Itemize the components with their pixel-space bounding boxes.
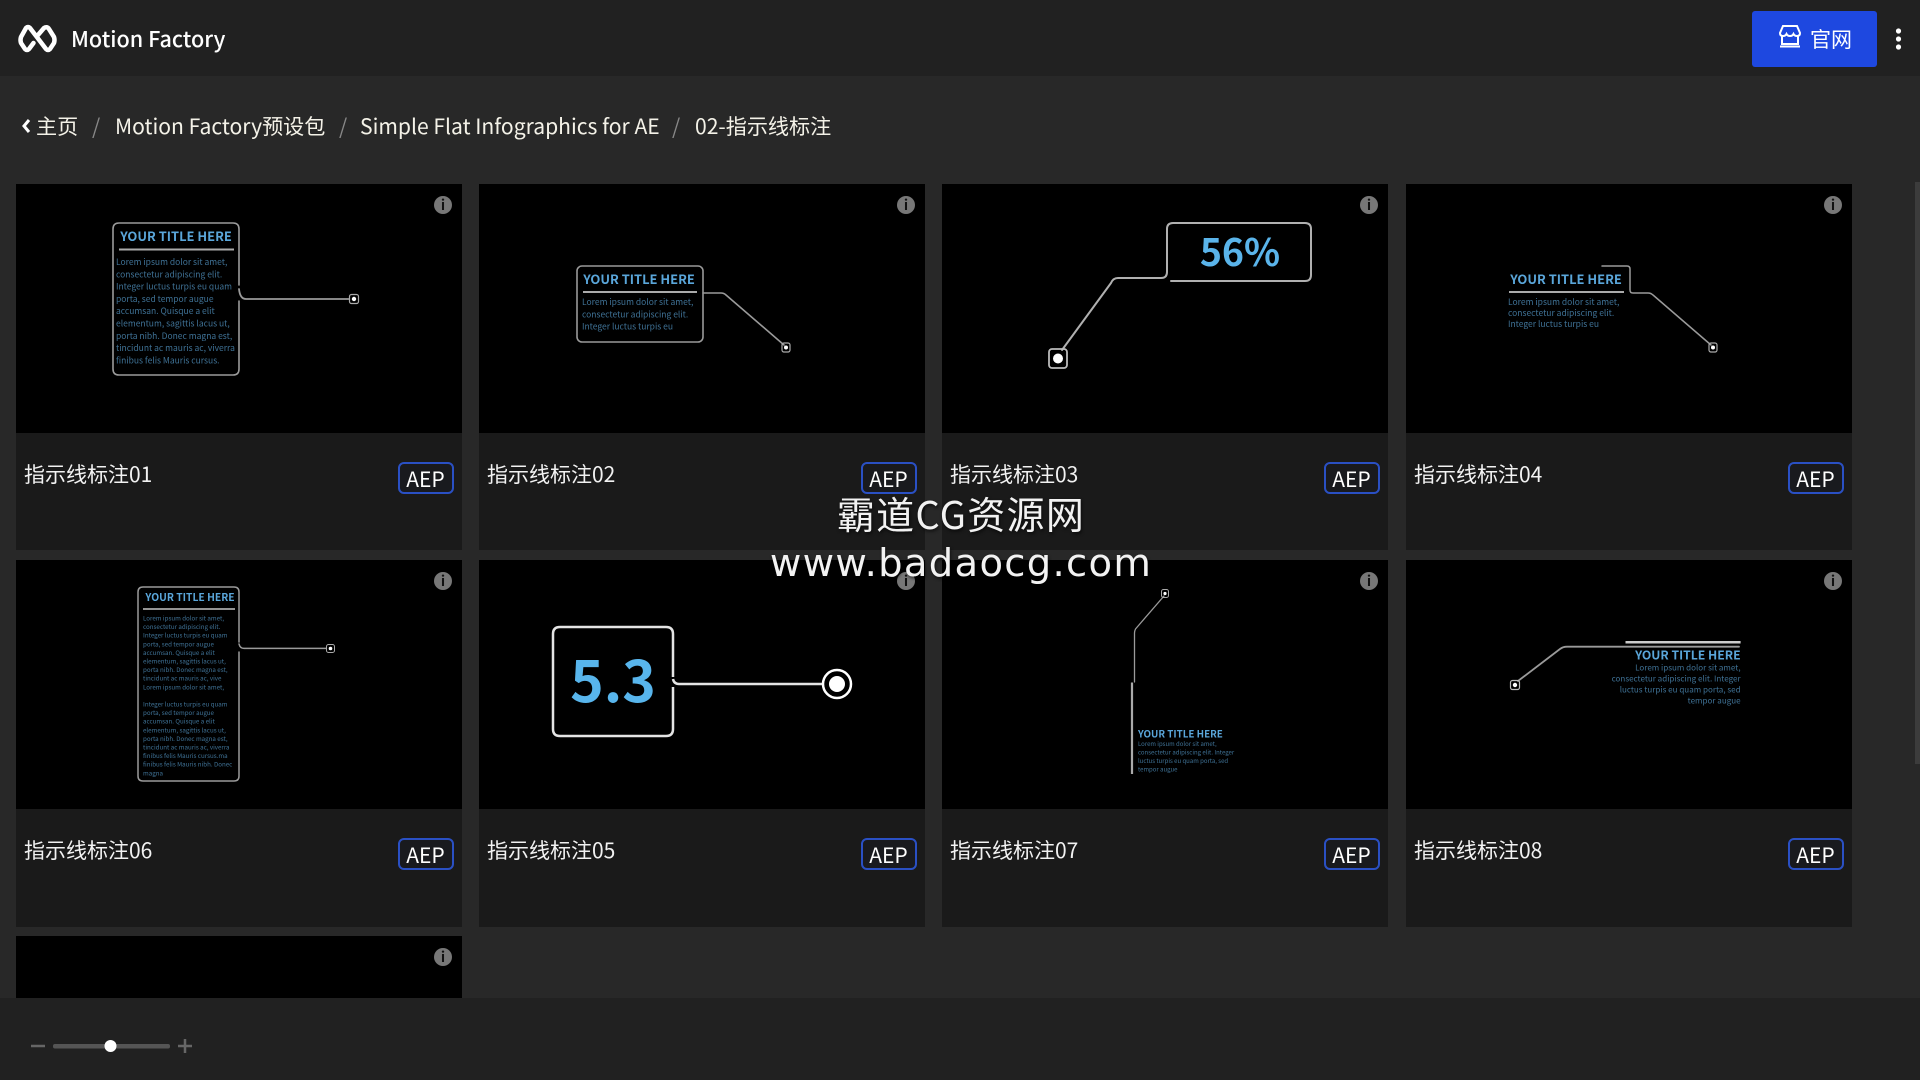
thumbnail: callout 01: porta, sed tempor augue xyxy=(116,293,214,305)
format badge: AEP xyxy=(869,464,908,494)
format badge: AEP xyxy=(1332,840,1371,870)
thumbnail: callout 02 xyxy=(479,184,925,433)
format badge: AEP xyxy=(1332,464,1371,494)
official site button xyxy=(1752,11,1877,67)
thumbnail: callout 05: i xyxy=(904,571,908,591)
format badge xyxy=(860,838,916,870)
bottom toolbar xyxy=(0,998,1920,1080)
thumbnail: callout 06: YOUR TITLE HERE xyxy=(144,589,235,604)
thumbnail: callout 06: porta nibh. Donec magna est, xyxy=(143,734,228,743)
icon: store xyxy=(1779,25,1801,48)
thumbnail: callout 07: i xyxy=(1367,571,1371,591)
breadcrumb navigation xyxy=(22,111,831,141)
card title: 指示线标注07 xyxy=(950,835,1078,865)
thumbnail: callout 01: finibus felis Mauris cursus. xyxy=(116,354,220,366)
format badge xyxy=(398,838,454,870)
thumbnail: callout 06: Integer luctus turpis eu quam xyxy=(143,631,228,640)
thumbnail: callout 06: tincidunt ac mauris ac, viverra xyxy=(143,742,230,752)
thumbnail: callout 04: Lorem ipsum dolor sit amet, xyxy=(1508,296,1619,308)
thumbnail: callout 07: consectetur adipiscing elit. Integer xyxy=(1138,748,1235,756)
icon: more menu dots xyxy=(1896,28,1902,50)
thumbnail: callout 05: 5.3 xyxy=(570,637,656,719)
card: callout 08 xyxy=(1406,560,1852,927)
breadcrumb navigation: / xyxy=(339,111,347,141)
breadcrumb: preset pack: Motion Factory预设包 xyxy=(115,111,325,141)
thumbnail: callout 04: Integer luctus turpis eu xyxy=(1508,318,1599,330)
thumbnail: callout 02: i xyxy=(904,195,908,215)
header bar xyxy=(0,0,1920,76)
card title: 指示线标注06 xyxy=(24,835,152,865)
thumbnail: callout 08: consectetur adipiscing elit. Integer xyxy=(1612,674,1741,684)
format badge xyxy=(1788,838,1844,870)
format badge: AEP xyxy=(869,840,908,870)
format badge xyxy=(1324,838,1380,870)
brand name: Motion Factory xyxy=(71,23,225,54)
thumbnail: callout 06: consectetur adipiscing elit. xyxy=(143,622,221,631)
card title: 指示线标注04 xyxy=(1414,459,1542,489)
card: callout 03 xyxy=(942,184,1388,550)
card title: 指示线标注08 xyxy=(1414,835,1542,865)
thumbnail: callout 06: i xyxy=(441,571,445,591)
format badge: AEP xyxy=(406,464,445,494)
thumbnail: callout 06: porta, sed tempor augue xyxy=(143,639,215,648)
thumbnail: callout 01: elementum, sagittis lacus ut, xyxy=(116,318,230,330)
card: callout 06 xyxy=(16,560,462,927)
card title: 指示线标注05 xyxy=(487,835,615,865)
card: callout 02 xyxy=(479,184,925,550)
thumbnail: callout 04 xyxy=(1406,184,1852,433)
thumbnail: callout 06: elementum, sagittis lacus ut, xyxy=(143,725,226,734)
card: callout 05 xyxy=(479,560,925,927)
breadcrumb: current page: 02-指示线标注 xyxy=(695,111,831,141)
thumbnail: callout 03 xyxy=(942,184,1388,433)
breadcrumb: product: Simple Flat Infographics for AE xyxy=(360,111,660,141)
thumbnail: callout 08: i xyxy=(1831,571,1835,591)
thumbnail: callout 04: i xyxy=(1831,195,1835,215)
thumbnail: callout 01: i xyxy=(441,195,445,215)
card: callout 07 xyxy=(942,560,1388,927)
thumbnail: callout 01 xyxy=(16,184,462,433)
thumbnail: callout 01: consectetur adipiscing elit. xyxy=(116,268,222,280)
thumbnail: callout 02: YOUR TITLE HERE xyxy=(582,269,695,288)
icon: Motion Factory logo xyxy=(18,24,57,52)
thumbnail: callout 06: Integer luctus turpis eu quam xyxy=(143,700,228,708)
thumbnail: callout 02: consectetur adipiscing elit. xyxy=(582,308,688,320)
card: callout 01 xyxy=(16,184,462,550)
watermark line 1: 霸道CG资源网 xyxy=(837,485,1085,540)
thumbnail: callout 06 xyxy=(16,560,462,809)
format badge xyxy=(398,462,454,494)
thumbnail: callout 01: Integer luctus turpis eu quam xyxy=(116,281,232,293)
icon: back chevron xyxy=(22,119,30,133)
thumbnail: callout 02: Integer luctus turpis eu xyxy=(582,321,673,333)
thumbnail: callout 07 xyxy=(942,560,1388,809)
thumbnail: callout 01: accumsan. Quisque a elit xyxy=(116,305,215,317)
thumbnail: callout 07: tempor augue xyxy=(1138,764,1178,774)
card title: 指示线标注02 xyxy=(487,459,615,489)
thumbnail: empty partially visible: i xyxy=(441,947,445,967)
thumbnail: empty partially visible xyxy=(16,936,462,998)
watermark line 2: www.badaocg.com xyxy=(770,541,1152,586)
card title: 指示线标注01 xyxy=(24,459,152,489)
thumbnail: callout 03: i xyxy=(1367,195,1371,215)
thumbnail: callout 06: tincidunt ac mauris ac, vive xyxy=(143,674,222,683)
breadcrumb navigation: / xyxy=(672,111,680,141)
breadcrumb navigation: / xyxy=(92,111,100,141)
thumbnail: callout 04: consectetur adipiscing elit. xyxy=(1508,307,1614,319)
thumbnail: callout 08: Lorem ipsum dolor sit amet, xyxy=(1635,662,1741,674)
format badge: AEP xyxy=(1796,464,1835,494)
thumbnail: callout 06: elementum, sagittis lacus ut, xyxy=(143,656,226,666)
thumbnail: callout 03: 56% xyxy=(1200,222,1280,277)
scrollbar xyxy=(1915,182,1920,764)
card: partial thumbnail row 3 xyxy=(16,936,462,998)
thumbnail: callout 01: YOUR TITLE HERE xyxy=(119,226,232,245)
thumbnail: callout 06: accumsan. Quisque a elit xyxy=(143,717,215,726)
thumbnail: callout 08: tempor augue xyxy=(1688,696,1741,706)
format badge: AEP xyxy=(406,840,445,870)
thumbnail: callout 07: Lorem ipsum dolor sit amet, xyxy=(1138,739,1217,748)
thumbnail: callout 04: YOUR TITLE HERE xyxy=(1509,269,1622,288)
thumbnail: callout 01: porta nibh. Donec magna est, xyxy=(116,330,232,342)
watermark xyxy=(770,485,1152,586)
format badge xyxy=(1324,462,1380,494)
thumbnail: callout 08: YOUR TITLE HERE xyxy=(1634,646,1741,664)
thumbnail: callout 06: porta nibh. Donec magna est, xyxy=(143,665,228,674)
thumbnail: callout 06: porta, sed tempor augue xyxy=(143,708,215,717)
thumbnail: callout 07: luctus turpis eu quam porta, sed xyxy=(1138,756,1228,765)
thumbnail: callout 06: Lorem ipsum dolor sit amet, xyxy=(143,682,224,691)
zoom slider xyxy=(31,1039,192,1053)
thumbnail: callout 07: YOUR TITLE HERE xyxy=(1137,726,1223,740)
thumbnail: callout 01: tincidunt ac mauris ac, viverra xyxy=(116,342,235,354)
format badge xyxy=(1788,462,1844,494)
thumbnail: callout 06: magna xyxy=(143,768,163,777)
card title: 指示线标注03 xyxy=(950,459,1078,489)
thumbnail: callout 06: Lorem ipsum dolor sit amet, xyxy=(143,614,224,622)
breadcrumb: home: 主页 xyxy=(36,111,78,141)
thumbnail: callout 05 xyxy=(479,560,925,809)
thumbnail: callout 06: accumsan. Quisque a elit xyxy=(143,648,215,657)
thumbnail: callout 08: luctus turpis eu quam porta, sed xyxy=(1620,684,1741,696)
thumbnail: callout 08 xyxy=(1406,560,1852,809)
format badge: AEP xyxy=(1796,840,1835,870)
card: callout 04 xyxy=(1406,184,1852,550)
button label: 官网 xyxy=(1810,24,1852,54)
thumbnail: callout 02: Lorem ipsum dolor sit amet, xyxy=(582,296,693,308)
thumbnail: callout 06: finibus felis Mauris cursus.ma xyxy=(143,751,228,760)
format badge xyxy=(860,462,916,494)
thumbnail: callout 06: finibus felis Mauris nibh. Donec xyxy=(143,760,232,769)
thumbnail: callout 01: Lorem ipsum dolor sit amet, xyxy=(116,256,227,268)
